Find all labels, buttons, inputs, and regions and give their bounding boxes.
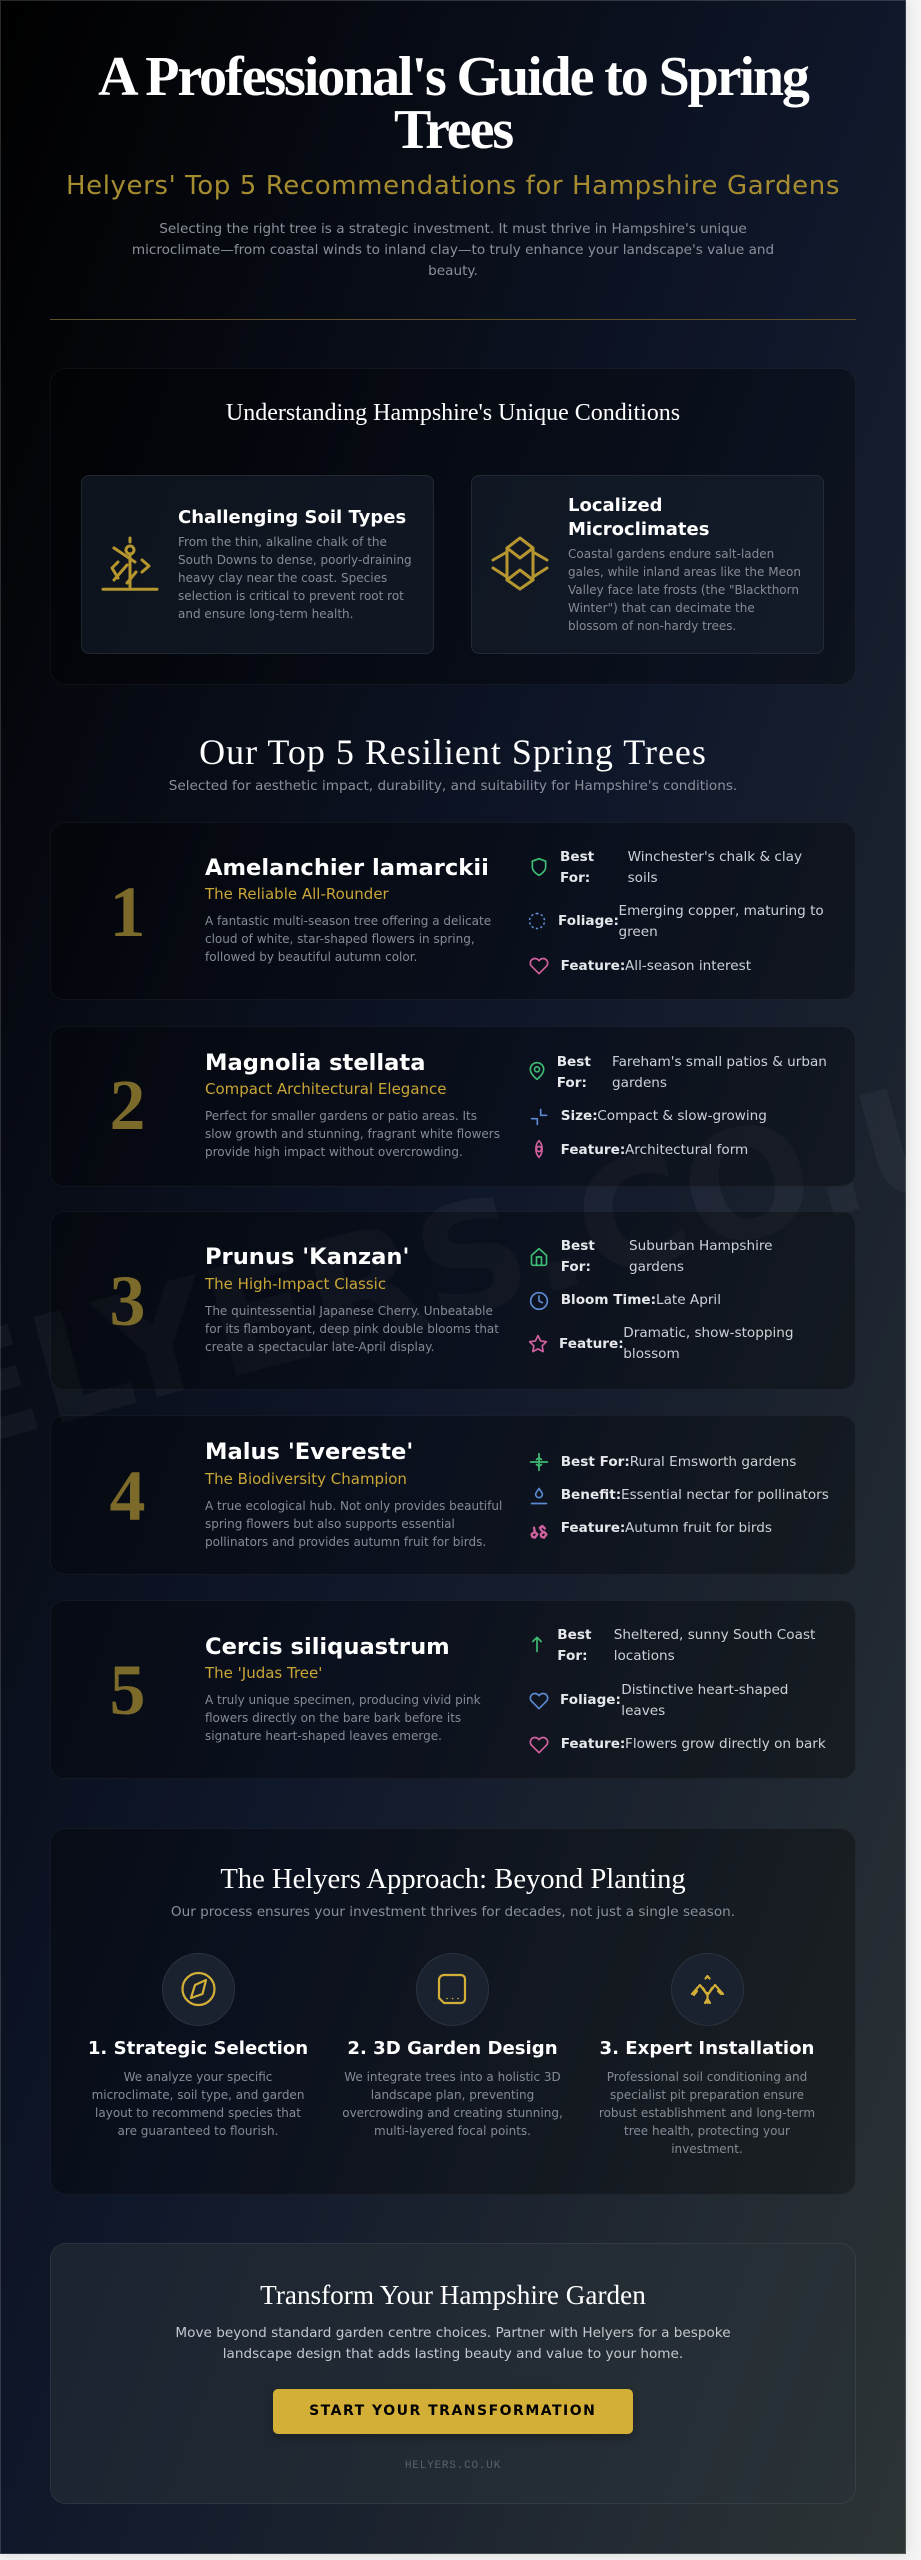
feature: best for: Best xyxy=(557,1627,591,1643)
heading: transform: Transform Your Hampshire Garden xyxy=(260,2280,646,2310)
subtitle: Helyers' Top 5 Recommendations for Hampshire Gardens xyxy=(66,171,840,201)
description: A truly unique specimen, producing vivid pink xyxy=(205,1693,481,1707)
feature: best for xyxy=(532,849,802,886)
step 3 text: Professional soil conditioning and xyxy=(607,2070,807,2084)
tagline: The Reliable All-Rounder xyxy=(205,884,389,902)
feature: bloom time: Bloom Time: xyxy=(561,1292,656,1308)
step 3 text xyxy=(599,2070,815,2156)
feature: best for xyxy=(530,1238,773,1275)
feature: size xyxy=(530,1108,767,1126)
heading: top 5: Our Top 5 Resilient Spring Trees xyxy=(199,732,707,772)
text: soil types xyxy=(178,534,412,620)
title: Trees xyxy=(394,99,512,161)
step 2 text: overcrowding and creating stunning, xyxy=(342,2106,563,2120)
feature: best for: gardens xyxy=(612,1074,667,1090)
feature: benefit: Benefit: xyxy=(561,1487,621,1503)
text: microclimates: gales, while inland areas like the Meon xyxy=(568,564,801,578)
step 3 title: 3. Expert Installation xyxy=(600,2038,814,2059)
description: Perfect for smaller gardens or patio areas. Its xyxy=(205,1109,477,1123)
number 2: 2 xyxy=(110,1065,146,1145)
step 3 text: robust establishment and long-term xyxy=(599,2106,815,2120)
feature: fruit xyxy=(530,1520,772,1539)
step 1 text: microclimate, soil type, and garden xyxy=(92,2088,304,2102)
description: signature heart-shaped leaves emerge. xyxy=(205,1729,442,1743)
subheading: approach: Our process ensures your investment thrives for decades, not just a single season. xyxy=(171,1904,735,1920)
description: pollinators and provides autumn fruit for birds. xyxy=(205,1535,486,1549)
feature: best for: For: xyxy=(561,1259,591,1275)
feature: foliage: Emerging copper, maturing to xyxy=(618,903,824,919)
number 5: 5 xyxy=(110,1650,146,1730)
feature: foliage xyxy=(530,1682,788,1718)
feature: foliage: leaves xyxy=(621,1702,665,1718)
feature: best for: Sheltered, sunny South Coast xyxy=(614,1627,815,1643)
step 1 title: 1. Strategic Selection xyxy=(88,2038,308,2059)
feature: form xyxy=(535,1140,748,1158)
feature: highlight: Feature: xyxy=(561,958,625,974)
description xyxy=(205,1109,500,1159)
step 3 text: specialist pit preparation ensure xyxy=(610,2088,804,2102)
step 3 text: tree health, protecting your xyxy=(624,2124,790,2138)
name: Malus 'Evereste' xyxy=(205,1439,413,1465)
text: soil types: From the thin, alkaline chalk of the xyxy=(178,534,387,548)
card: microclimates xyxy=(471,475,824,654)
feature: flowers: Feature: xyxy=(561,1736,625,1752)
step 2 text: multi-layered focal points. xyxy=(374,2124,531,2138)
text: call to action: Move beyond standard garden centre choices. Partner with Helyers for a bespoke xyxy=(175,2325,731,2341)
text: microclimates xyxy=(568,546,801,632)
text: microclimates: blossom of non-hardy trees. xyxy=(568,618,736,632)
text: microclimates: Winter") that can decimate the xyxy=(568,600,755,614)
feature: best for xyxy=(532,1627,815,1664)
description xyxy=(205,1693,481,1743)
heading: conditions: Understanding Hampshire's Unique Conditions xyxy=(226,400,680,426)
text: soil types: and ensure long-term health. xyxy=(178,606,353,620)
text: soil types: South Downs to dense, poorly-draining xyxy=(178,552,412,566)
panel: Hampshire conditions xyxy=(50,368,856,685)
button xyxy=(272,2389,633,2434)
number 1: 1 xyxy=(110,872,146,952)
feature: foliage: Distinctive heart-shaped xyxy=(621,1682,788,1698)
heading: microclimates: Microclimates xyxy=(568,519,709,540)
description: slow growth and stunning, fragrant white flowers xyxy=(205,1127,500,1141)
text: microclimates: Valley face late frosts (the "Blackthorn xyxy=(568,582,799,596)
step 1 text xyxy=(92,2070,304,2138)
tagline: Compact Architectural Elegance xyxy=(205,1080,447,1098)
card: tree 4 xyxy=(50,1415,856,1575)
feature: form: Architectural form xyxy=(625,1142,748,1158)
intro text: beauty. xyxy=(428,263,478,279)
feature: foliage: Foliage: xyxy=(558,913,619,929)
feature: best for: gardens xyxy=(629,1259,684,1275)
feature: foliage: Foliage: xyxy=(560,1692,621,1708)
feature: form: Feature: xyxy=(561,1142,625,1158)
feature: size: Compact & slow-growing xyxy=(597,1108,767,1124)
card: tree 5 xyxy=(50,1600,856,1779)
description: spring flowers but also supports essential xyxy=(205,1517,455,1531)
name: Magnolia stellata xyxy=(205,1050,425,1076)
feature: best for: Best For: xyxy=(561,1454,630,1470)
button: START YOUR TRANSFORMATION xyxy=(309,2403,596,2419)
description: A fantastic multi-season tree offering a delicate xyxy=(205,914,491,928)
subheading: top 5: Selected for aesthetic impact, durability, and suitability for Hampshire's conditions. xyxy=(169,778,737,794)
feature: best for: Best xyxy=(557,1054,591,1070)
icon: 3D design xyxy=(416,1953,489,2026)
feature: best for: For: xyxy=(560,870,590,886)
description: create a spectacular late-April display. xyxy=(205,1340,434,1354)
feature: benefit xyxy=(530,1487,829,1504)
feature: display: Feature: xyxy=(559,1336,624,1352)
text: call to action: landscape design that adds lasting beauty and value to your home. xyxy=(223,2346,683,2362)
name: Amelanchier lamarckii xyxy=(205,855,489,881)
feature: display: Dramatic, show-stopping xyxy=(623,1325,794,1341)
number 4: 4 xyxy=(110,1456,146,1536)
intro text xyxy=(132,221,774,279)
text: soil types: heavy clay near the coast. Species xyxy=(178,570,387,584)
heading: approach: The Helyers Approach: Beyond Planting xyxy=(220,1864,686,1895)
feature: best for: soils xyxy=(628,870,658,886)
feature: benefit: Essential nectar for pollinators xyxy=(621,1487,829,1503)
feature: foliage: green xyxy=(618,924,658,940)
feature: best for xyxy=(530,1452,796,1472)
icon: microclimate xyxy=(491,536,549,590)
description: A true ecological hub. Not only provides beautiful xyxy=(205,1499,502,1513)
description: flowers directly on the bare bark before its xyxy=(205,1711,461,1725)
feature: best for: Best xyxy=(560,849,594,865)
intro text: microclimate—from coastal winds to inland clay—to truly enhance your landscape's value and xyxy=(132,242,774,258)
tagline: The High-Impact Classic xyxy=(205,1274,386,1292)
icon: installation xyxy=(670,1953,744,2026)
footer url: HELYERS.CO.UK xyxy=(405,2460,501,2472)
description: cloud of white, star-shaped flowers in spring, xyxy=(205,932,475,946)
tagline: The 'Judas Tree' xyxy=(205,1664,322,1682)
feature: bloom time: Late April xyxy=(656,1292,721,1308)
step 1 text: layout to recommend species that xyxy=(95,2106,301,2120)
feature: best for: For: xyxy=(557,1074,587,1090)
feature: fruit: Feature: xyxy=(561,1520,625,1536)
feature: best for: Rural Emsworth gardens xyxy=(630,1454,796,1470)
step 2 title: 2. 3D Garden Design xyxy=(347,2038,558,2059)
text: microclimates: Coastal gardens endure salt-laden xyxy=(568,546,774,560)
card: tree 3 xyxy=(50,1211,856,1390)
description: for its flamboyant, deep pink double blooms that xyxy=(205,1322,499,1336)
text: soil types: selection is critical to prevent root rot xyxy=(178,588,404,602)
feature: best for: Fareham's small patios & urban xyxy=(612,1054,827,1070)
name: Prunus 'Kanzan' xyxy=(205,1244,409,1270)
feature: best for: Suburban Hampshire xyxy=(629,1238,773,1254)
feature: fruit: Autumn fruit for birds xyxy=(625,1520,772,1536)
description xyxy=(205,1499,502,1549)
card: tree 1 xyxy=(50,822,856,1000)
title: A Professional's Guide to Spring xyxy=(98,46,808,108)
step 2 text: landscape plan, preventing xyxy=(371,2088,534,2102)
name: Cercis siliquastrum xyxy=(205,1634,450,1660)
description xyxy=(204,1304,499,1354)
description: followed by beautiful autumn color. xyxy=(205,950,417,964)
feature: flowers: Flowers grow directly on bark xyxy=(625,1736,826,1752)
step 3 text: investment. xyxy=(671,2142,743,2156)
feature: bloom time xyxy=(530,1292,721,1310)
icon: soil xyxy=(102,536,158,591)
icon: compass xyxy=(162,1953,235,2026)
feature: best for xyxy=(530,1054,827,1090)
feature: highlight xyxy=(530,958,751,974)
panel: the Helyers approach xyxy=(50,1828,856,2195)
feature: best for: locations xyxy=(614,1648,675,1664)
feature: flowers xyxy=(530,1736,826,1754)
heading: microclimates xyxy=(568,495,709,540)
panel: call to action xyxy=(50,2243,856,2504)
card: tree 2 xyxy=(50,1026,856,1187)
description xyxy=(205,914,491,964)
number 3: 3 xyxy=(110,1260,146,1340)
card: soil types xyxy=(81,475,434,654)
step 2 text: We integrate trees into a holistic 3D xyxy=(344,2070,561,2084)
step 2 text xyxy=(342,2070,563,2138)
step 1 text: are guaranteed to flourish. xyxy=(118,2124,278,2138)
tagline: The Biodiversity Champion xyxy=(205,1470,407,1488)
feature: best for: Best xyxy=(561,1238,595,1254)
feature: best for: For: xyxy=(557,1648,588,1664)
feature: display: blossom xyxy=(623,1346,680,1362)
intro text: Selecting the right tree is a strategic investment. It must thrive in Hampshire's unique xyxy=(159,221,747,237)
description: The quintessential Japanese Cherry. Unbeatable xyxy=(205,1304,493,1318)
feature: foliage xyxy=(528,903,824,940)
text: call to action xyxy=(175,2325,731,2362)
feature: display xyxy=(528,1325,794,1362)
feature: highlight: All-season interest xyxy=(625,958,751,974)
heading: soil types: Challenging Soil Types xyxy=(178,507,406,528)
feature: best for: Winchester's chalk & clay xyxy=(628,849,802,865)
heading: microclimates: Localized xyxy=(568,495,663,516)
feature: size: Size: xyxy=(561,1108,598,1124)
step 1 text: We analyze your specific xyxy=(124,2070,272,2084)
title xyxy=(98,46,810,161)
description: provide high impact without overcrowding. xyxy=(205,1145,463,1159)
